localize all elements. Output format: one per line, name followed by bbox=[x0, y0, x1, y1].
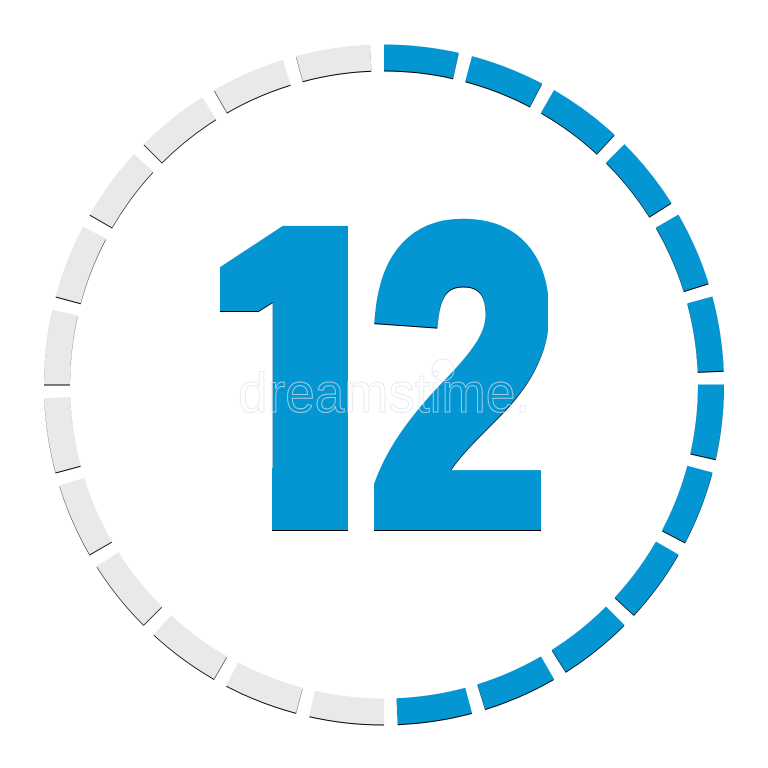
ring: 12 blue progress segments bbox=[384, 44, 732, 732]
watermark: dreamstime. bbox=[238, 361, 530, 424]
circular progress infographic bbox=[44, 44, 724, 726]
number 12 bbox=[220, 218, 548, 531]
number 12: 2 bbox=[370, 140, 558, 620]
number 12: 1 bbox=[188, 147, 414, 608]
ring: 12 grey remaining segments bbox=[36, 37, 384, 725]
